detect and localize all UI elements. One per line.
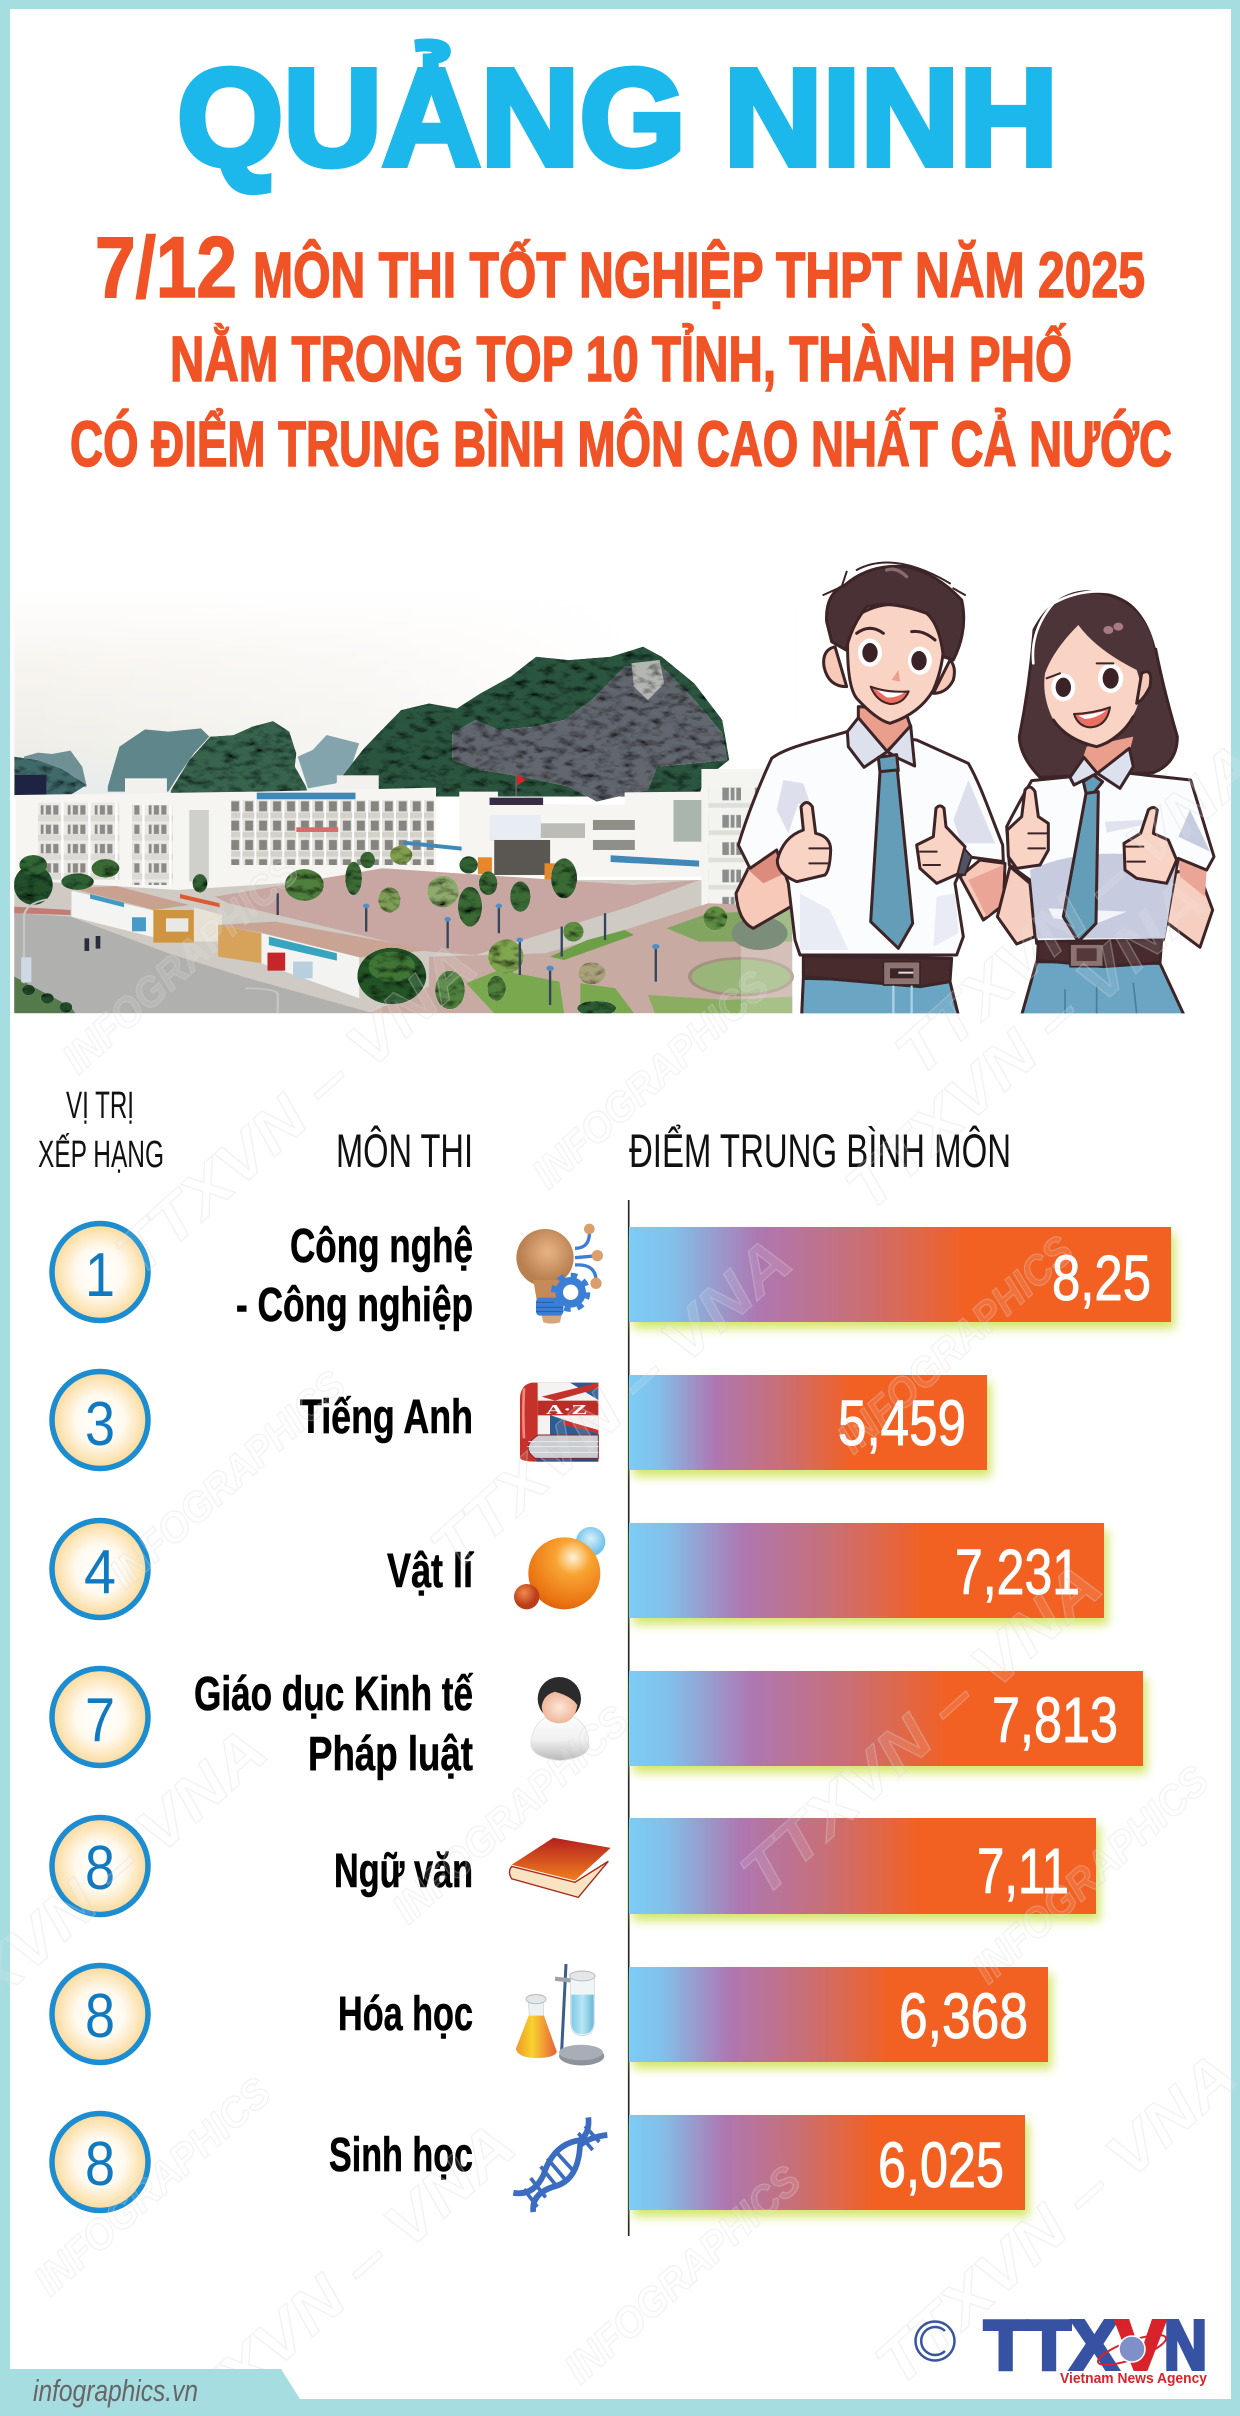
rank numbers: 7 xyxy=(85,1686,115,1755)
bar values: 5,459 xyxy=(838,1387,966,1459)
bar values: 8,25 xyxy=(1052,1242,1151,1314)
subject labels: Vật lí xyxy=(387,1545,474,1598)
wordmark: V xyxy=(1116,2306,1165,2384)
left building xyxy=(16,788,436,890)
bar values: 6,368 xyxy=(899,1980,1028,2052)
watermarks: INFOGRAPHICS xyxy=(100,1361,354,1597)
bar values xyxy=(838,1242,1151,2201)
icon: light bulb with gear xyxy=(516,1224,603,1324)
boy xyxy=(736,562,1005,1015)
rank numbers: 3 xyxy=(85,1390,115,1459)
watermarks: TTXVN – VNA xyxy=(727,1550,1115,1909)
illustration: students giving thumbs up xyxy=(736,562,1214,1015)
rank numbers xyxy=(84,1241,116,2199)
bar chart xyxy=(629,1227,1171,2210)
bar values: 7,11 xyxy=(977,1835,1069,1907)
tagline: Vietnam News Agency xyxy=(1060,2370,1208,2387)
subject labels: Pháp luật xyxy=(308,1728,473,1781)
rank numbers: 1 xyxy=(85,1241,115,1310)
subtitle: 7/12 xyxy=(95,220,237,316)
watermarks: INFOGRAPHICS xyxy=(53,846,307,1082)
rank circles xyxy=(52,1224,148,2210)
watermarks: TTXVN – VNA xyxy=(832,865,1220,1224)
table header: VỊ TRỊ xyxy=(66,1085,134,1127)
subject labels: Ngữ văn xyxy=(334,1845,473,1898)
road xyxy=(14,913,373,1013)
logo: TTXVN xyxy=(916,2306,1208,2387)
lamps xyxy=(278,893,660,1005)
subject labels: Sinh học xyxy=(329,2129,473,2182)
watermarks: TTXVN – VNA xyxy=(862,2040,1240,2399)
watermarks: INFOGRAPHICS xyxy=(383,1696,637,1932)
footer source text: infographics.vn xyxy=(33,2373,198,2408)
icon: English dictionary: A·Z xyxy=(546,1402,588,1417)
icon: physics spheres xyxy=(514,1527,605,1609)
subtitle xyxy=(70,220,1172,480)
bar values: 7,813 xyxy=(992,1684,1118,1756)
plaza xyxy=(215,868,699,955)
photo: school and limestone mountains xyxy=(14,629,794,1014)
icon: literature book xyxy=(509,1838,611,1897)
icon: English dictionary xyxy=(520,1383,598,1462)
girl xyxy=(997,591,1214,1015)
title: QUẢNG NINH xyxy=(177,41,1058,195)
wordmark: N xyxy=(1164,2306,1207,2384)
subject labels xyxy=(194,1220,474,2182)
trees xyxy=(14,846,727,1016)
watermarks: INFOGRAPHICS xyxy=(523,961,777,1197)
bar values: 6,025 xyxy=(878,2129,1004,2201)
rank numbers: 8 xyxy=(85,2130,115,2199)
watermarks xyxy=(0,730,1240,2416)
watermarks: INFOGRAPHICS xyxy=(555,2156,809,2392)
rank numbers: 8 xyxy=(85,1982,115,2051)
icon: person xyxy=(531,1677,589,1761)
wordmark: TTX xyxy=(984,2306,1118,2384)
subject labels: Tiếng Anh xyxy=(300,1391,473,1444)
watermarks: INFOGRAPHICS xyxy=(963,1756,1217,1992)
footer tab xyxy=(0,2369,1240,2416)
axis line xyxy=(628,1200,630,2236)
subject labels: Giáo dục Kinh tế xyxy=(194,1668,473,1721)
lawns and paths xyxy=(369,903,792,1013)
far right building xyxy=(701,769,765,906)
globe xyxy=(1095,2329,1169,2371)
ground xyxy=(14,880,792,1013)
subject labels: - Công nghiệp xyxy=(236,1279,473,1332)
watermarks: TTXVN – VNA xyxy=(417,1225,805,1584)
icon: DNA helix xyxy=(513,2117,607,2212)
watermarks: INFOGRAPHICS xyxy=(25,2068,279,2304)
watermarks: INFOGRAPHICS xyxy=(828,1226,1082,1462)
copyright symbol xyxy=(916,2322,954,2360)
table header: MÔN THI xyxy=(336,1124,473,1177)
watermarks: TTXVN – VNA xyxy=(102,930,490,1289)
table header: ĐIỂM TRUNG BÌNH MÔN xyxy=(629,1124,1011,1177)
subject labels: Công nghệ xyxy=(290,1220,473,1273)
table header: XẾP HẠNG xyxy=(38,1132,164,1176)
low buildings xyxy=(71,886,189,910)
right building xyxy=(459,792,701,877)
rank numbers: 4 xyxy=(84,1538,116,1607)
rank numbers: 8 xyxy=(85,1834,115,1903)
wordmark xyxy=(984,2306,1207,2384)
table header xyxy=(38,1085,1011,1177)
bar values: 7,231 xyxy=(955,1536,1080,1608)
subject labels: Hóa học xyxy=(338,1988,473,2041)
icon: chemistry flasks xyxy=(516,1964,604,2065)
watermarks: TTXVN – VNA xyxy=(882,730,1240,1089)
